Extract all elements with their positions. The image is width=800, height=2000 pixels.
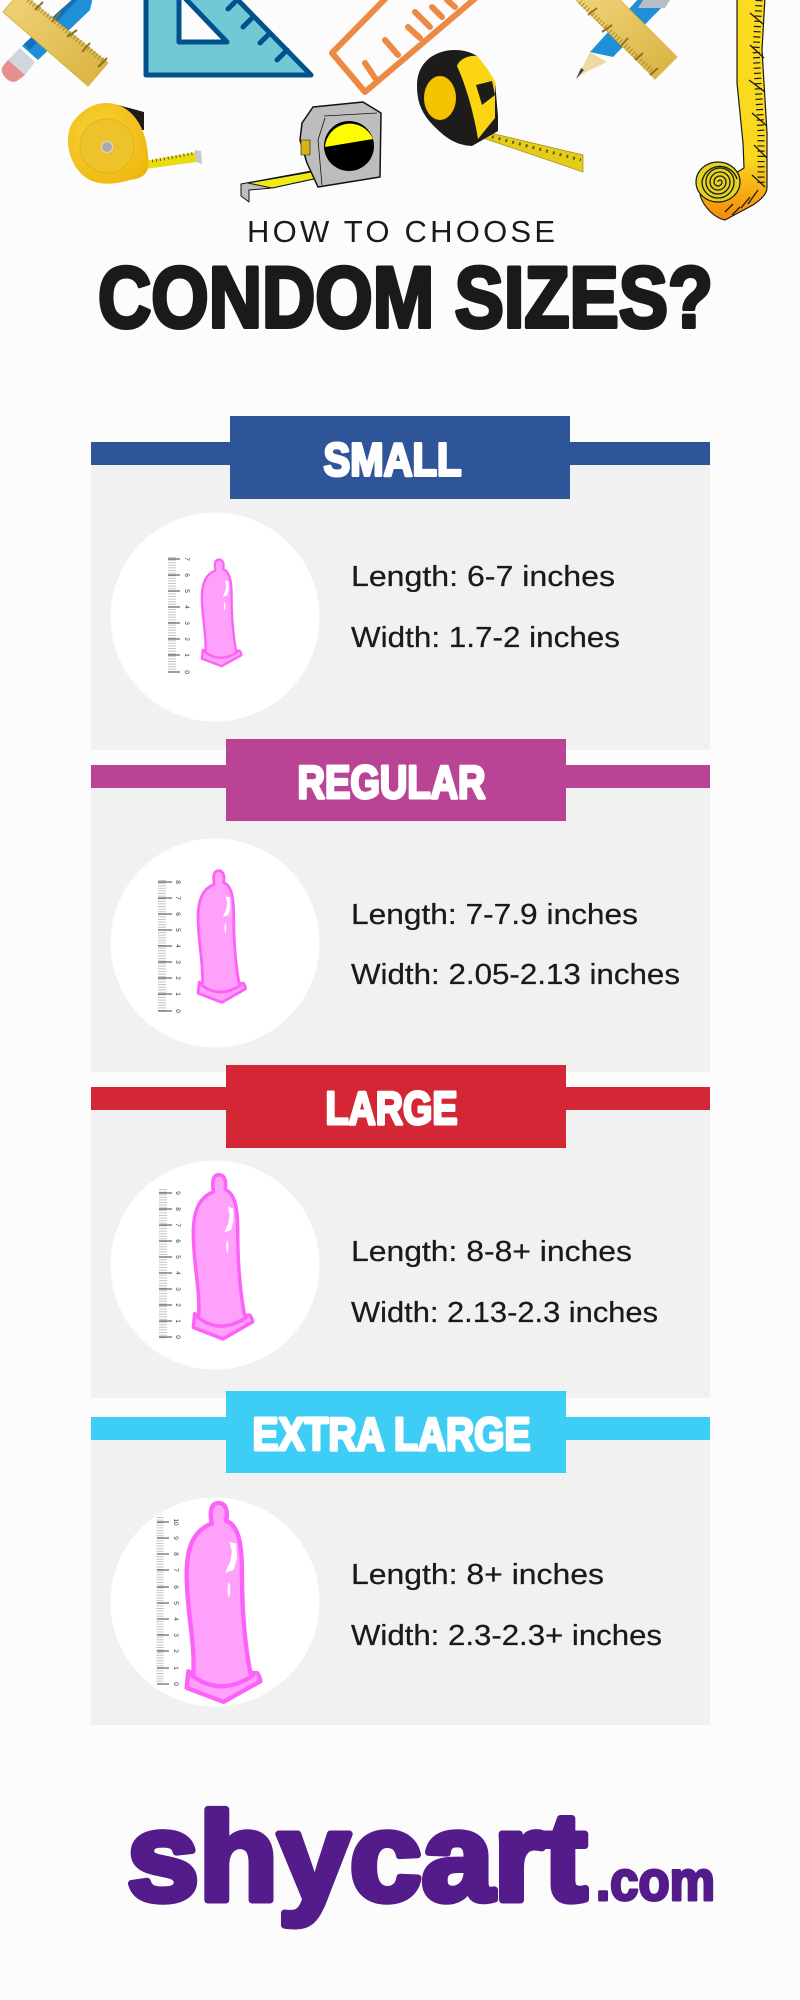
text: extra large dimensions: Length: 8+ inches xyxy=(351,1559,604,1591)
icon: set square xyxy=(146,0,311,75)
illustration: small size: 3 xyxy=(183,621,190,625)
text: small dimensions xyxy=(351,561,620,654)
heading: large xyxy=(226,1065,566,1148)
illustration: extra large size: 9 xyxy=(172,1536,179,1540)
illustration: extra large size: 2 xyxy=(172,1649,179,1653)
illustration: extra large size: 3 xyxy=(172,1633,179,1637)
illustration: regular size: 7 xyxy=(174,896,181,900)
panel: regular xyxy=(91,739,710,1072)
illustration: regular size xyxy=(110,838,320,1048)
icon: ruler and pencil, top right xyxy=(573,0,677,79)
text: large dimensions: Width: 2.13-2.3 inches xyxy=(351,1297,658,1329)
heading: extra large: EXTRA LARGE xyxy=(252,1408,530,1460)
illustration: large size: 1 xyxy=(174,1319,181,1323)
illustration: small size: 7 xyxy=(183,557,190,561)
illustration: regular size: 2 xyxy=(174,976,181,980)
illustration: large size: 4 xyxy=(174,1271,181,1275)
text: extra large dimensions xyxy=(351,1559,662,1652)
logo: shycart.com: .com xyxy=(596,1849,715,1912)
illustration: extra large size: 7 xyxy=(172,1568,179,1572)
illustration: small size: 1 xyxy=(183,653,190,657)
illustration: extra large size: 4 xyxy=(172,1617,179,1621)
illustration: extra large size: 10 xyxy=(172,1518,179,1526)
illustration: small size: 0 xyxy=(183,670,190,674)
illustration: large size xyxy=(110,1160,320,1370)
text: large dimensions: Length: 8-8+ inches xyxy=(351,1236,632,1268)
illustration: extra large size: 1 xyxy=(172,1666,179,1670)
heading: small xyxy=(230,416,570,499)
heading: small: SMALL xyxy=(324,434,462,486)
illustration: small size: 4 xyxy=(183,605,190,609)
text: small dimensions: Length: 6-7 inches xyxy=(351,561,615,593)
illustration: small size xyxy=(110,512,320,722)
illustration: small size: 2 xyxy=(183,637,190,641)
text: regular dimensions: Length: 7-7.9 inches xyxy=(351,899,638,931)
heading: large: LARGE xyxy=(326,1082,458,1134)
icon: grey tape measure xyxy=(241,102,381,202)
icon: black and yellow tape measure xyxy=(417,50,583,172)
illustration: small size: 6 xyxy=(183,573,190,577)
illustration: regular size: 5 xyxy=(174,928,181,932)
illustration: extra large size: 0 xyxy=(172,1682,179,1686)
illustration: large size: 2 xyxy=(174,1303,181,1307)
illustration: extra large size xyxy=(110,1498,320,1706)
text: extra large dimensions: Width: 2.3-2.3+ inches xyxy=(351,1620,662,1652)
title line: how to choose: HOW TO CHOOSE xyxy=(247,214,555,249)
illustration: regular size: 6 xyxy=(174,912,181,916)
title xyxy=(98,214,713,346)
heading: extra large xyxy=(226,1391,566,1473)
text: small dimensions: Width: 1.7-2 inches xyxy=(351,622,620,654)
illustration: small size: 5 xyxy=(183,589,190,593)
heading: regular: REGULAR xyxy=(298,756,486,808)
illustration: large size: 3 xyxy=(174,1287,181,1291)
illustration: regular size: 8 xyxy=(174,880,181,884)
icon: hanging tape with roll xyxy=(696,0,767,220)
icon: yellow tape measure xyxy=(68,103,202,184)
illustration: regular size: 1 xyxy=(174,992,181,996)
illustration: regular size: 3 xyxy=(174,960,181,964)
illustration: large size: 7 xyxy=(174,1223,181,1227)
icon: ruler and pencil, top left xyxy=(2,0,108,86)
text: regular dimensions: Width: 2.05-2.13 inches xyxy=(351,959,680,991)
illustration: extra large size: 5 xyxy=(172,1601,179,1605)
panel: large xyxy=(91,1065,710,1398)
illustration: large size: 8 xyxy=(174,1207,181,1211)
illustration: large size: 0 xyxy=(174,1335,181,1339)
panel: extra large xyxy=(91,1391,710,1725)
icon: orange ruler xyxy=(332,0,478,92)
panel: small xyxy=(91,416,710,750)
text: regular dimensions xyxy=(351,899,680,991)
illustration: extra large size: 6 xyxy=(172,1585,179,1589)
illustration: large size: 5 xyxy=(174,1255,181,1259)
title line: condom sizes: CONDOM SIZES? xyxy=(98,250,713,346)
illustration: large size: 6 xyxy=(174,1239,181,1243)
text: large dimensions xyxy=(351,1236,658,1329)
illustration: regular size: 4 xyxy=(174,944,181,948)
illustration: regular size: 0 xyxy=(174,1009,181,1013)
illustration: extra large size: 8 xyxy=(172,1552,179,1556)
heading: regular xyxy=(226,739,566,821)
illustration: large size: 9 xyxy=(174,1191,181,1195)
logo: shycart.com: shycart xyxy=(127,1788,587,1927)
